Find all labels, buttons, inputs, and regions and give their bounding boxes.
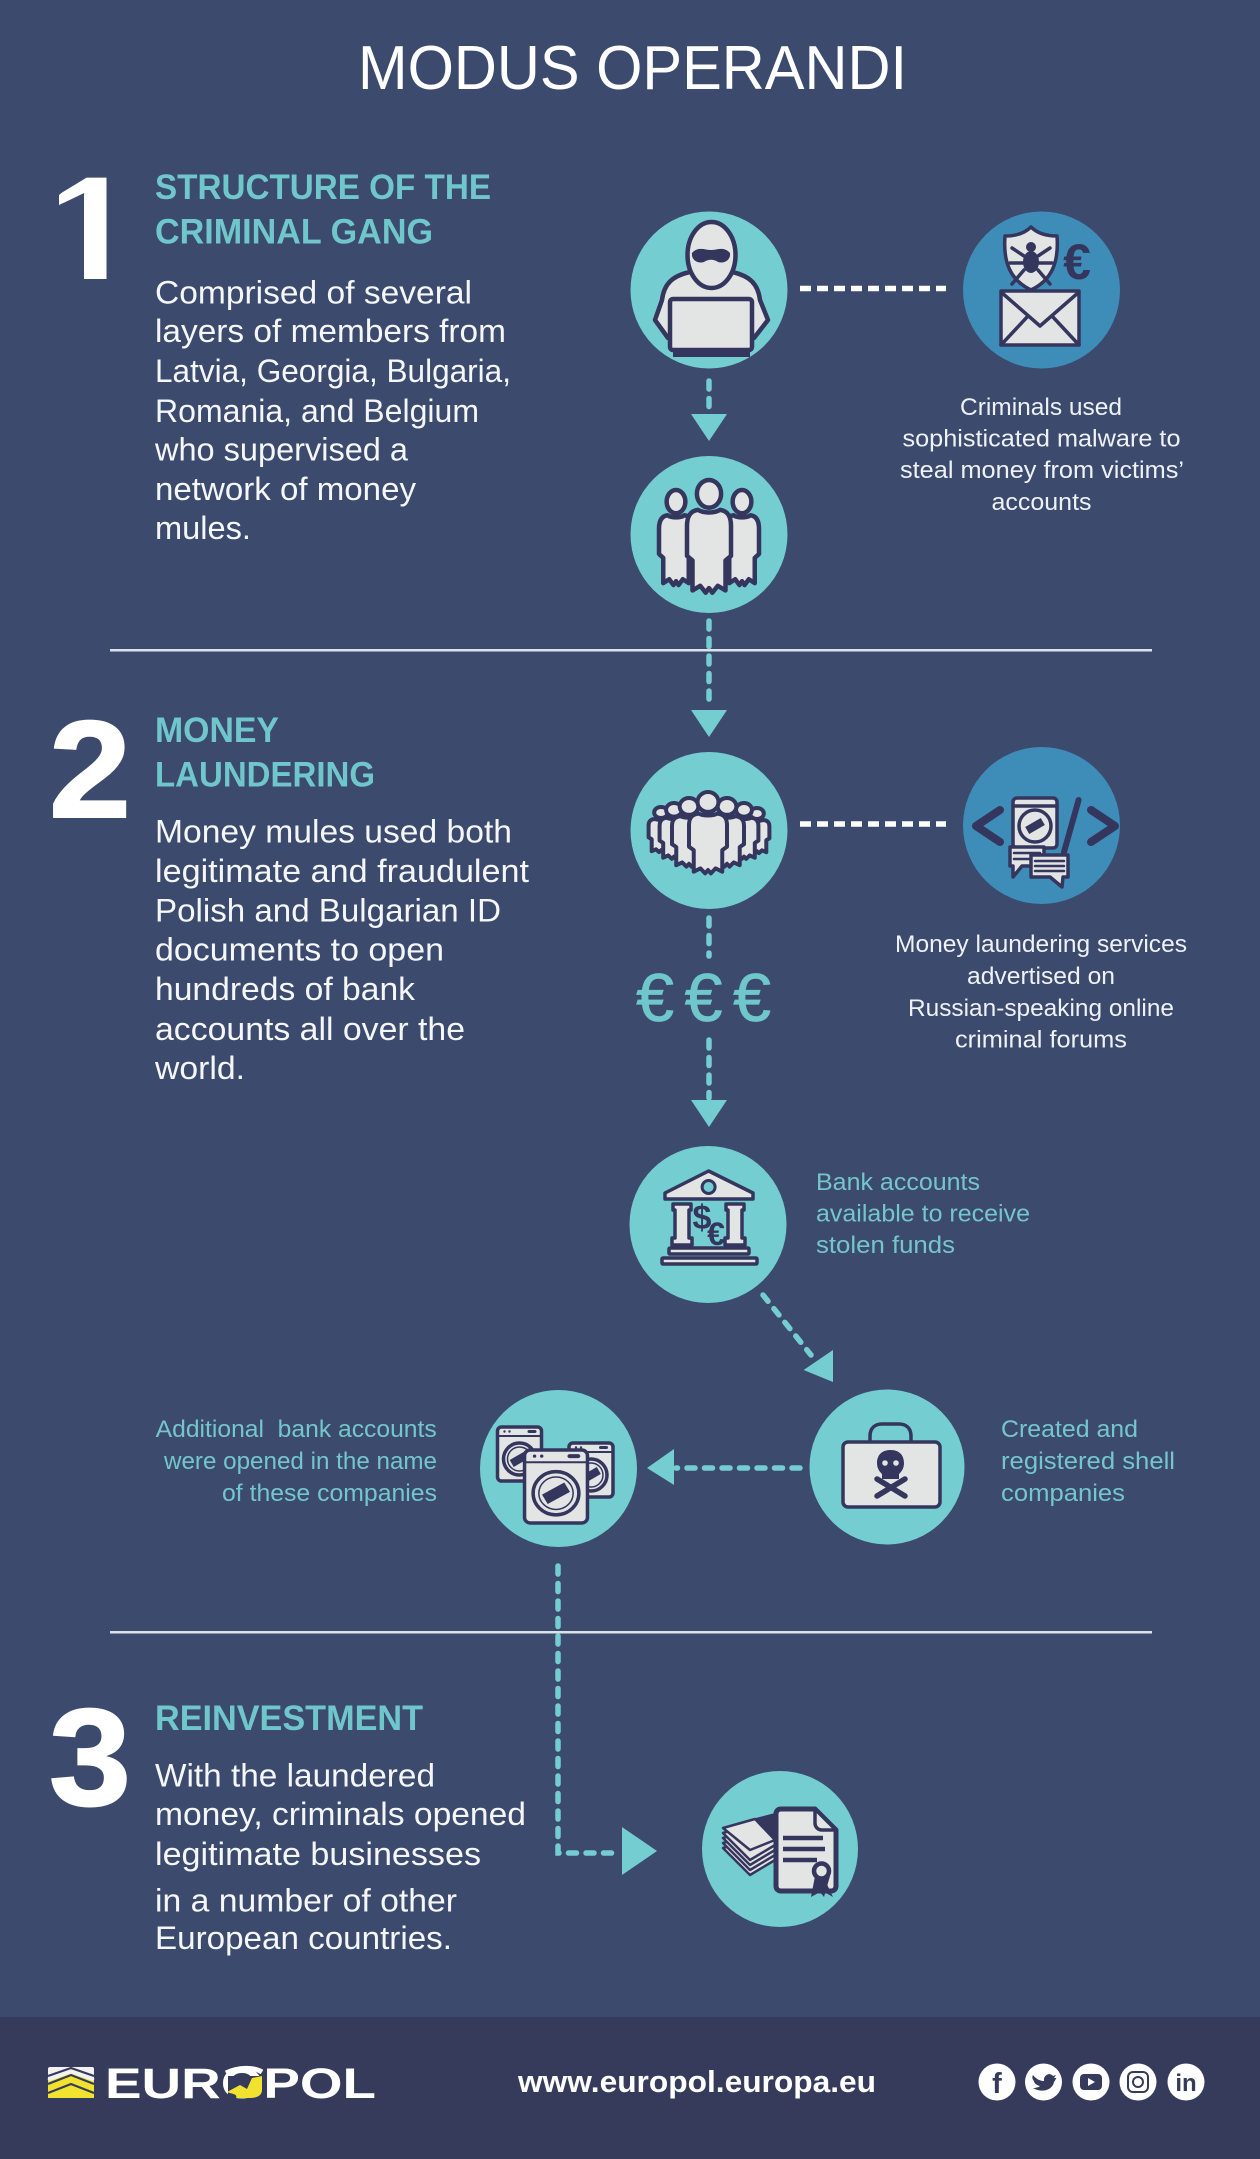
icon: hooded hacker at laptop [630, 212, 788, 368]
icon: team of three [630, 456, 788, 613]
section 1 body text: who supervised a [154, 432, 409, 468]
section 1 body text: Comprised of several [155, 275, 472, 311]
euro symbols: € [733, 960, 771, 1036]
icon: linkedin: in [1175, 2070, 1197, 2097]
euro symbols: € [636, 960, 674, 1036]
caption: shell companies: registered shell [1001, 1448, 1175, 1475]
caption: malware: Criminals used [960, 394, 1122, 421]
caption: forums: Money laundering services [895, 931, 1187, 958]
caption: shell companies [1001, 1416, 1175, 1507]
euro symbols: € [685, 960, 723, 1036]
section 3 body text: With the laundered [155, 1758, 435, 1794]
caption: forums [895, 931, 1187, 1054]
section 3 body text: money, criminals opened [155, 1796, 526, 1832]
section 2 body text: documents to open [155, 932, 444, 968]
website url: www.europol.europa.eu [517, 2064, 876, 2099]
caption: additional accounts: were opened in the name [163, 1448, 437, 1475]
icon: instagram [1120, 2064, 1156, 2100]
section 2 number: 2 [49, 693, 131, 847]
caption: shell companies: companies [1001, 1480, 1125, 1507]
dashed connector: hacker to malware [800, 286, 946, 291]
icon: documents and certificate [702, 1771, 858, 1927]
caption: malware: accounts [992, 489, 1092, 516]
section 1 body text: Latvia, Georgia, Bulgaria, [155, 353, 511, 389]
arrow: bank to shell company [763, 1295, 833, 1382]
caption: malware: sophisticated malware to [902, 426, 1180, 453]
section 3 body text: European countries. [155, 1920, 452, 1956]
caption: forums: criminal forums [955, 1027, 1127, 1054]
section 2 heading: MONEY [155, 711, 279, 750]
caption: forums: Russian-speaking online [908, 995, 1174, 1022]
section 1 body text: layers of members from [155, 313, 506, 349]
title: MODUS OPERANDI [358, 34, 907, 103]
section 1 body text: mules. [155, 510, 251, 546]
Europol logo: EUROPOL [105, 2060, 376, 2108]
section 2 body text: accounts all over the [155, 1011, 465, 1047]
icon: facebook: f [992, 2068, 1002, 2100]
section 1 body text: Romania, and Belgium [155, 393, 479, 429]
section 3 body text [155, 1758, 526, 1956]
caption: additional accounts: of these companies [222, 1480, 437, 1507]
section 3 body text: in a number of other [155, 1883, 457, 1919]
arrow: euros to bank [691, 1040, 727, 1127]
dashed connector: crowd to forums [800, 821, 946, 827]
arrow: hacker to team [691, 381, 727, 441]
caption: bank accounts: available to receive [816, 1201, 1030, 1228]
arrow: team to crowd [691, 621, 727, 737]
icon: crowd of mules [630, 752, 788, 909]
icon: malware email [963, 212, 1120, 368]
section 2 heading [155, 711, 375, 795]
arrow: shell company to accounts [647, 1449, 800, 1485]
Europol logo [48, 2060, 376, 2108]
section 1 number: 1 [53, 155, 135, 309]
section 2 body text [154, 814, 529, 1086]
section 1 heading: CRIMINAL GANG [155, 213, 433, 252]
icon: bank building [630, 1146, 786, 1303]
section 1 body text: network of money [155, 471, 417, 507]
caption: shell companies: Created and [1001, 1416, 1138, 1443]
icon: bank building: € [707, 1216, 725, 1252]
icon: briefcase with skull [810, 1390, 964, 1544]
section 3 heading: REINVESTMENT [155, 1699, 423, 1738]
section 2 body text: legitimate and fraudulent [155, 853, 529, 889]
caption: additional accounts: Additional bank accounts [156, 1416, 437, 1443]
icon: linkedin [1168, 2064, 1204, 2100]
section 2 body text: Money mules used both [155, 814, 512, 850]
arrow: accounts to reinvestment [558, 1566, 657, 1875]
section 3 number: 3 [49, 1681, 131, 1835]
divider [110, 649, 1152, 652]
arrow: crowd to euros [706, 918, 712, 956]
icon: twitter [1025, 2064, 1062, 2100]
footer band [0, 2017, 1260, 2159]
icon: facebook [978, 2064, 1016, 2100]
section 1 heading [155, 168, 491, 252]
section 2 body text: hundreds of bank [155, 971, 416, 1007]
caption: malware: steal money from victims’ [900, 457, 1184, 484]
icon: online forum code [963, 747, 1120, 904]
section 3 body text: legitimate businesses [155, 1836, 481, 1872]
caption: additional accounts [156, 1416, 437, 1507]
section 2 body text: world. [154, 1050, 245, 1086]
caption: bank accounts: Bank accounts [816, 1169, 980, 1196]
icon: bank building: $ [693, 1199, 712, 1237]
section 1 body text [154, 275, 511, 546]
icon: malware email: € [1063, 234, 1091, 290]
section 1 heading: STRUCTURE OF THE [155, 168, 491, 207]
divider [110, 1631, 1152, 1634]
caption: malware [900, 394, 1184, 516]
icon: youtube [1072, 2064, 1110, 2100]
caption: bank accounts: stolen funds [816, 1232, 955, 1259]
section 2 body text: Polish and Bulgarian ID [155, 893, 501, 929]
caption: bank accounts [816, 1169, 1030, 1259]
euro symbols [636, 960, 771, 1036]
section 2 heading: LAUNDERING [155, 756, 375, 795]
icon: three washing machines [480, 1390, 637, 1547]
caption: forums: advertised on [967, 963, 1115, 990]
